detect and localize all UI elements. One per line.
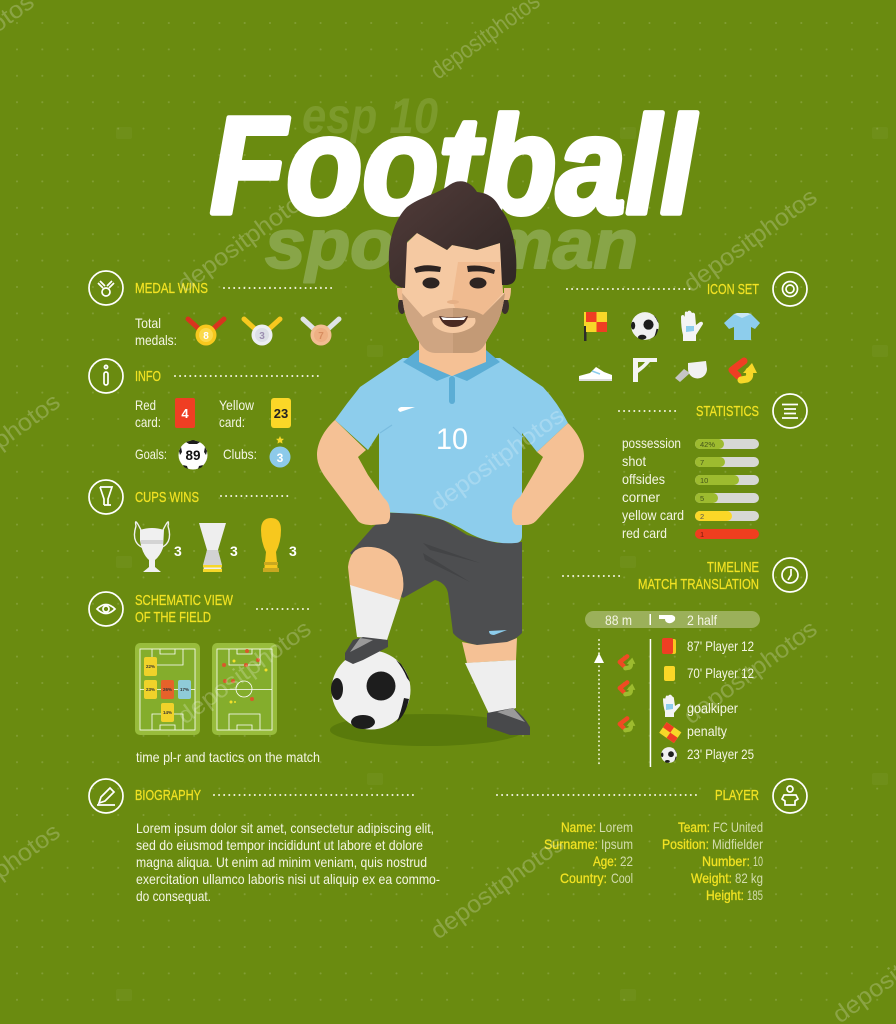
- time pill: [585, 611, 760, 628]
- label: yellow card: card:: [219, 414, 245, 430]
- bronze medal: 7: [318, 331, 324, 342]
- label: red card: card:: [135, 414, 161, 430]
- standing leg sock: [465, 660, 516, 716]
- heading: timeline: MATCH TRANSLATION: [638, 577, 759, 593]
- field: player zones: [135, 643, 200, 735]
- gold medal: [188, 319, 224, 346]
- heading: info: INFO: [135, 369, 161, 385]
- biography text: [136, 820, 440, 904]
- label: total medals: Total: [135, 315, 161, 331]
- bent leg sock: [350, 585, 400, 640]
- heading: medal wins: MEDAL WINS: [135, 281, 208, 297]
- football: [331, 650, 410, 730]
- sideburns behind ears: [398, 298, 509, 314]
- panel: biography: [89, 779, 440, 904]
- panel: schematic view of the field: [89, 592, 320, 765]
- heading: statistics: STATISTICS: [696, 404, 759, 420]
- ears: [397, 288, 511, 300]
- icon: lines circle: [773, 394, 807, 428]
- icon: eye circle: [89, 592, 123, 626]
- nose: [447, 300, 459, 304]
- player details column 2: 185: [747, 887, 763, 903]
- stat: offsides: offsides: [622, 471, 665, 487]
- label: total medals: medals:: [135, 332, 177, 348]
- ground shadow: [330, 714, 524, 746]
- caption: time pl-r and tactics on the match: [136, 749, 320, 765]
- stat: shot: shot: [622, 453, 646, 469]
- event: goalkeeper: goalkiper: [687, 700, 738, 716]
- eyes: [422, 278, 440, 288]
- icon: shoe: [579, 367, 612, 381]
- substitution 1: [620, 656, 635, 668]
- shirt logo: [398, 407, 415, 412]
- hair: [389, 181, 516, 288]
- eyebrows: [414, 265, 495, 274]
- event: goalkeeper: [663, 695, 738, 717]
- watermarks: depositphotos: [173, 183, 316, 298]
- field: player zones: 22%: [146, 664, 155, 669]
- player details column 1: 22: [620, 853, 633, 869]
- player details column 1: Name:: [561, 819, 596, 835]
- player details column 1: Lorem: [599, 819, 633, 835]
- icon: info circle: [89, 359, 123, 393]
- icon: substitution arrows: [732, 361, 757, 380]
- chin patch: [432, 318, 476, 333]
- bent leg skin: [348, 547, 403, 600]
- face shaded side: [452, 262, 503, 315]
- field: player zones: 26%: [163, 687, 172, 692]
- player details column 1: Age:: [593, 853, 617, 869]
- right arm: [512, 423, 584, 525]
- bent leg shoe: [345, 637, 388, 664]
- stat: yellow card: 2: [700, 512, 704, 521]
- timeline axis: [650, 639, 651, 767]
- icon: flag: [584, 312, 607, 341]
- time pill: 88 m: [605, 612, 632, 628]
- beard: [402, 293, 505, 353]
- field: player zones: 17%: [180, 687, 189, 692]
- event: red card: 87' Player 12: [687, 638, 754, 654]
- stat: red card: red card: [622, 525, 667, 541]
- panel: player: [497, 779, 807, 903]
- heading: player: PLAYER: [715, 788, 759, 804]
- heading: biography: BIOGRAPHY: [135, 788, 201, 804]
- player details column 1: Ipsum: [601, 836, 633, 852]
- player details column 1: Country:: [560, 870, 607, 886]
- biography text: magna aliqua. Ut enim ad minim veniam, quis nostrud: [136, 854, 427, 870]
- label: goals: Goals:: [135, 446, 167, 462]
- substitution 2: [620, 682, 635, 694]
- player details column 2: Position:: [662, 836, 709, 852]
- stat: red card: 1: [700, 530, 704, 539]
- shorts creases: [423, 543, 480, 582]
- player details column 2: Team:: [678, 819, 710, 835]
- icon: whistle: [675, 361, 707, 382]
- label: clubs: Clubs:: [223, 446, 257, 462]
- gold medal: 8: [203, 331, 209, 342]
- title: Football: Football: [210, 88, 698, 243]
- watermarks: depositphotos: [173, 615, 316, 730]
- label: yellow card: Yellow: [219, 397, 255, 413]
- yellow card value: 23: [274, 406, 288, 421]
- player details column 2: FC United: [713, 819, 763, 835]
- event: yellow card: 70' Player 12: [687, 665, 754, 681]
- biography text: Lorem ipsum dolor sit amet, consectetur adipiscing elit,: [136, 820, 434, 836]
- substitution 3: [620, 718, 635, 730]
- heading: schematic view: SCHEMATIC VIEW: [135, 593, 233, 609]
- panel: statistics: [619, 394, 807, 541]
- shirt collar: [403, 350, 500, 381]
- shorts: [350, 513, 522, 645]
- field: tactics: [212, 643, 277, 735]
- event: red card: [662, 638, 754, 654]
- clubs badge: [270, 436, 290, 468]
- panel: timeline match translation: [563, 558, 807, 767]
- dotted team track: [594, 640, 604, 767]
- stat: shot: [622, 453, 759, 469]
- field: player zones: 14%: [163, 710, 172, 715]
- silver medal: [244, 319, 280, 346]
- player details column 1: [544, 819, 633, 886]
- stat: yellow card: [622, 507, 759, 523]
- event: penalty: penalty: [687, 723, 727, 739]
- player details column 2: [662, 819, 763, 903]
- stat: red card: [622, 525, 759, 541]
- footballer illustration: [317, 181, 584, 746]
- neck: [419, 335, 486, 376]
- stat: possession: [622, 435, 759, 451]
- shirt number: 10: [436, 423, 468, 456]
- player details column 2: Weight:: [691, 870, 732, 886]
- left arm: [317, 420, 390, 525]
- red card value: [175, 398, 195, 428]
- standing leg shoe: [487, 708, 530, 735]
- standing leg skin: [462, 638, 517, 663]
- shirt: [335, 358, 568, 543]
- watermarks: depositphotos: [679, 615, 822, 730]
- heading: icon set: ICON SET: [707, 282, 759, 298]
- player details column 2: Height:: [706, 887, 744, 903]
- mouth: [439, 316, 468, 327]
- heading: timeline: TIMELINE: [707, 560, 759, 576]
- heading: cups wins: CUPS WINS: [135, 490, 199, 506]
- time pill: 2 half: [687, 612, 717, 628]
- stat: corner: corner: [622, 489, 660, 505]
- title: esp 10 ghost text: esp 10: [302, 88, 438, 144]
- trophy: europa cup: [199, 523, 226, 572]
- player details column 1: Surname:: [544, 836, 598, 852]
- face: [402, 233, 505, 353]
- stat: possession: possession: [622, 435, 681, 451]
- silver medal: 3: [259, 331, 265, 342]
- panel: icon set: [567, 272, 807, 382]
- event: goal: 23' Player 25: [687, 746, 754, 762]
- number: 3: [230, 543, 238, 559]
- yellow card value: [271, 398, 291, 428]
- biography text: sed do eiusmod tempor incididunt ut labore et dolore: [136, 837, 423, 853]
- panel: medal wins: [89, 271, 339, 348]
- watermarks: depositphotos: [679, 183, 822, 298]
- icon: glove: [681, 311, 703, 341]
- sleeve creases: [380, 425, 523, 437]
- icon: player circle: [773, 779, 807, 813]
- panel: cups wins: [89, 480, 297, 572]
- goals ball: [178, 440, 208, 470]
- stat: corner: [622, 489, 759, 505]
- player details column 2: Number:: [702, 853, 750, 869]
- trophy: champions cup: [134, 522, 170, 572]
- watermarks: depositphotos: [426, 402, 569, 517]
- biography text: do consequat.: [136, 888, 211, 904]
- watermarks: depositphotos: [426, 830, 569, 945]
- stat: corner: 5: [700, 494, 704, 503]
- number: 3: [174, 543, 182, 559]
- goals ball: 89: [185, 448, 201, 463]
- shirt placket: [449, 376, 455, 404]
- shorts logo: [489, 630, 507, 635]
- number: 3: [289, 543, 297, 559]
- icon: medal circle: [89, 271, 123, 305]
- label: red card: [135, 397, 161, 430]
- event: goal: [661, 746, 754, 763]
- panel: info: [89, 359, 321, 470]
- player details column 2: 10: [753, 853, 763, 869]
- red card value: 4: [181, 406, 189, 421]
- label: total medals: [135, 315, 177, 348]
- icon: shirt: [724, 313, 760, 340]
- trophy: world cup: [261, 518, 281, 572]
- icon: ball: [631, 312, 659, 340]
- camera watermark marks: [116, 127, 888, 1001]
- title: sportsman ghost text: sportsman: [265, 205, 638, 283]
- label: yellow card: [219, 397, 255, 430]
- icon: corner: [633, 358, 657, 382]
- heading: schematic view: [135, 593, 233, 626]
- biography text: exercitation ullamco laboris nisi ut aliquip ex ea commo-: [136, 871, 440, 887]
- heading: schematic view: OF THE FIELD: [135, 610, 211, 626]
- clubs badge: 3: [277, 451, 284, 465]
- player details column 2: 82 kg: [735, 870, 763, 886]
- stat: offsides: 10: [700, 476, 708, 485]
- field: player zones: 23%: [146, 687, 155, 692]
- label: red card: Red: [135, 397, 156, 413]
- heading: timeline: [638, 560, 759, 593]
- stat: shot: 7: [700, 458, 704, 467]
- player details column 2: Midfielder: [712, 836, 763, 852]
- stat: offsides: [622, 471, 759, 487]
- player details column 1: Cool: [611, 870, 633, 886]
- icon: cup circle: [89, 480, 123, 514]
- icon: pencil circle: [89, 779, 123, 813]
- event: yellow card: [664, 665, 754, 681]
- stat: possession: 42%: [700, 440, 715, 449]
- event: penalty: [659, 722, 727, 743]
- bronze medal: [303, 319, 339, 346]
- icon: target circle: [773, 272, 807, 306]
- icon: clock circle: [773, 558, 807, 592]
- stat: yellow card: yellow card: [622, 507, 684, 523]
- beard shaded side: [453, 293, 505, 353]
